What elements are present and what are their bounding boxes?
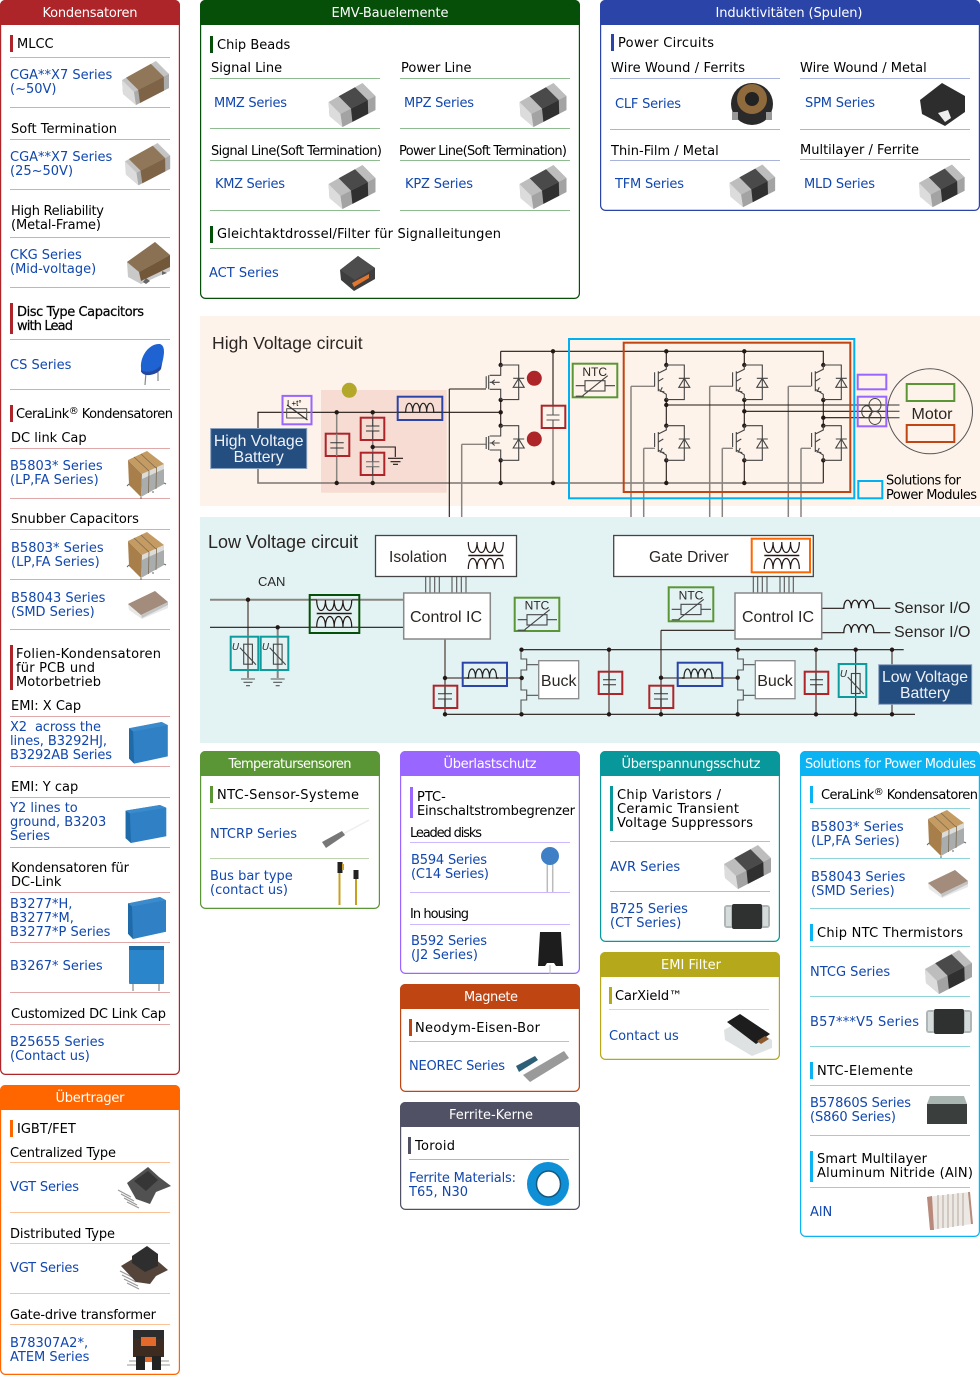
sub-heading: Signal Line: Signal Line [211, 61, 282, 76]
panel header: EMV-Bauelemente [200, 0, 580, 25]
panel: Ueberspannungsschutz [600, 751, 780, 941]
link: KPZ Series: KPZ Series [405, 177, 473, 192]
heading: CeraLink Kondensatoren: Kondensatoren [78, 407, 173, 422]
heading: Chip Varistors: Voltage Suppressors [617, 816, 753, 831]
capacitor: left buck input [434, 686, 457, 708]
icon: NTCRP sensor [322, 820, 369, 848]
link: B78307A2 ATEM Series: ATEM Series [10, 1350, 90, 1365]
inductor: high voltage filter [398, 397, 442, 420]
capacitor: DC link [326, 434, 349, 456]
block: Control IC left: Control IC [410, 609, 482, 626]
heading: Neodym-Eisen-Bor: Neodym-Eisen-Bor [415, 1021, 541, 1036]
heading: CeraLink Kondensatoren: CeraLink [821, 788, 874, 803]
panel header: Magnete: Magnete [464, 990, 518, 1005]
heading: CarXield: CarXield™ [615, 989, 682, 1004]
icon: leaded film capacitor [129, 946, 164, 991]
link: C14 Series: (C14 Series) [411, 867, 489, 882]
heading: MLCC: MLCC [17, 37, 54, 52]
panel header: EMI Filter [600, 952, 780, 977]
link: B5803 Series: (LP,FA Series) [811, 834, 900, 849]
icon: magnets [516, 1051, 569, 1082]
block: Buck left: Buck [541, 673, 577, 690]
component: high voltage battery: Battery [234, 449, 284, 466]
icon: SMD capacitor [128, 591, 168, 619]
heading: Chip Varistors: Ceramic Transient [617, 802, 739, 817]
link: CGA X7 25 to 50V: (25~50V) [10, 164, 73, 179]
panel header: Temperatursensoren: Temperatursensoren [228, 757, 352, 772]
marker: red dot lower [527, 432, 542, 446]
heading: Gleichtaktdrossel/Filter: Gleichtaktdrossel/Filter für Signalleitungen [217, 227, 501, 242]
component: high voltage battery [211, 428, 307, 468]
heading: CeraLink Kondensatoren [810, 786, 978, 803]
link: B5803 Series snubber: B5803* Series [11, 541, 104, 556]
icon: Y capacitor [126, 805, 166, 843]
frame: power modules [569, 339, 854, 498]
link: X2 across the lines: X2 across the [10, 720, 101, 735]
sub-heading: Power Line: Power Line [401, 61, 472, 76]
sub-heading: Leaded disks: Leaded disks [410, 826, 482, 841]
icon: DC-link film capacitor [128, 897, 166, 939]
heading: NTC-Sensor-Systeme: NTC-Sensor-Systeme [217, 788, 359, 803]
sub-heading: Soft Termination: Soft Termination [11, 122, 117, 137]
heading: IGBT/FET: IGBT/FET [17, 1122, 76, 1137]
panel header: Kondensatoren: Kondensatoren [42, 6, 138, 21]
block: Buck left [539, 661, 579, 699]
frame: purple ferrite clamp [858, 397, 886, 426]
link: Bus bar type: (contact us) [210, 883, 288, 898]
icon: olive marker [342, 383, 357, 398]
icon: chip bead MMZ [328, 83, 376, 127]
heading: Power Circuits: Power Circuits [618, 36, 714, 51]
link: MLD Series: MLD Series [804, 177, 875, 192]
block: Isolation [376, 536, 516, 576]
link: AlN: AlN [810, 1205, 832, 1220]
link: Bus bar type: Bus bar type [210, 869, 293, 884]
icon: CeraLink capacitor [927, 810, 966, 858]
heading: Smart Multilayer AlN [810, 1151, 973, 1182]
panel header: Solutions for Power Modules: Solutions for Power Modules [805, 757, 976, 772]
capacitor: Y cap lower [361, 453, 384, 475]
legend: solutions for power modules: Power Modules [886, 488, 977, 503]
component: low voltage battery: Low Voltage [882, 669, 968, 686]
switch: MOSFET upper [486, 365, 524, 400]
link: Ferrite Materials: Ferrite Materials: [409, 1171, 516, 1186]
heading: NTC-Elemente: NTC-Elemente [817, 1064, 913, 1079]
panel header: EMI Filter: EMI Filter [661, 958, 722, 973]
link: B3292AB Series: B3292AB Series [10, 748, 112, 763]
varistor: battery side [839, 664, 866, 697]
link: CGA X7 up to 50V: CGA**X7 Series [10, 68, 112, 83]
link: B58043 Series: B58043 Series [11, 591, 105, 606]
panel: Temperatursensoren [200, 751, 380, 908]
link: ACT Series: ACT Series [209, 266, 279, 281]
panel: Uebertrager [0, 1085, 180, 1374]
component: low voltage battery: Battery [900, 685, 950, 702]
icon: chip bead MPZ [520, 83, 566, 127]
link: Y2 lines to ground: ground, B3203 [10, 815, 106, 830]
link: B3267 Series: B3267* Series [10, 959, 103, 974]
panel: Low Voltage circuit [200, 517, 980, 743]
link: Contact us: Contact us [609, 1029, 679, 1044]
inductor: right buck [678, 663, 722, 686]
group: IGBT inverter switches [655, 365, 847, 460]
link: NTCG Series: NTCG Series [810, 965, 890, 980]
panel header: Ueberspannungsschutz: Überspannungsschutz [622, 755, 761, 772]
link: B594 Series: B594 Series [411, 853, 487, 868]
link: NEOREC Series: NEOREC Series [409, 1059, 505, 1074]
icon: S860 element [927, 1096, 967, 1124]
icon: CeraLink capacitor [127, 451, 166, 499]
link: Y2 lines to ground: Series [10, 829, 50, 844]
link: B5803 Series: (LP,FA Series) [10, 473, 99, 488]
link: B58043 Series: B58043 Series [811, 870, 905, 885]
link: MMZ Series: MMZ Series [214, 96, 287, 111]
link: CS Series: CS Series [10, 358, 72, 373]
wiring: low voltage lines [210, 576, 915, 714]
link: TFM Series: TFM Series [614, 177, 684, 192]
panel header: Ferrite-Kerne: Ferrite-Kerne [449, 1108, 533, 1123]
link: NTCRP Series: NTCRP Series [210, 827, 297, 842]
heading: Chip NTC Thermistors: Chip NTC Thermistors [817, 926, 963, 941]
link: SPM Series: SPM Series [805, 96, 875, 111]
sub-heading: Thin-Film Metal: Thin-Film / Metal [610, 144, 719, 159]
icon: MLD inductor [919, 164, 965, 207]
panel header: Ueberspannungsschutz [600, 751, 780, 776]
component: motor: Motor [912, 406, 953, 423]
panel header: Ueberlastschutz [400, 751, 580, 776]
common mode choke [310, 595, 359, 633]
panel header: Uebertrager [0, 1085, 180, 1110]
heading: CeraLink Kondensatoren: ® [69, 406, 79, 417]
link: CLF Series: CLF Series [615, 97, 681, 112]
block: Control IC right: Control IC [742, 609, 814, 626]
NTC: power module [573, 364, 617, 397]
link: CGA X7 up to 50V: (~50V) [10, 82, 56, 97]
heading: CeraLink Kondensatoren: Kondensatoren [883, 788, 978, 803]
heading: Low Voltage circuit: Low Voltage circuit [208, 532, 358, 552]
wiring: high voltage rails [258, 351, 899, 535]
NTC: low voltage left: NTC [525, 598, 550, 612]
heading: Chip Varistors: Chip Varistors / [617, 788, 722, 803]
link: B725 Series: (CT Series) [610, 916, 681, 931]
link: B5803 Series snubber: (LP,FA Series) [11, 555, 100, 570]
panel: Induktivitaeten [600, 0, 980, 210]
block: Gate Driver [614, 536, 813, 576]
panel header: Kondensatoren [0, 0, 180, 25]
sub-heading: Distributed Type: Distributed Type [10, 1227, 115, 1242]
icon: CarXield filter [724, 1014, 772, 1056]
link: B58043 Series: (SMD Series) [11, 605, 95, 620]
block: Buck right: Buck [757, 673, 794, 690]
sub-heading: High Reliability: High Reliability [11, 204, 104, 219]
sub-heading: In housing: In housing [410, 907, 469, 922]
icon: ferrite toroid [527, 1162, 569, 1206]
component: low voltage battery [879, 665, 972, 704]
panel: Kondensatoren [0, 0, 180, 1074]
label: CAN: CAN [258, 574, 285, 589]
switch: MOSFET lower [486, 426, 524, 460]
sub-heading: Multilayer Ferrite: Multilayer / Ferrite [800, 143, 919, 158]
heading: Disc Type Capacitors with Lead [10, 303, 144, 334]
heading: CeraLink Kondensatoren [10, 405, 173, 422]
frame: magnets inverter [624, 343, 850, 492]
legend: solutions for power modules [858, 474, 977, 503]
icon: CLF inductor [731, 83, 773, 125]
icon: distributed transformer [120, 1246, 168, 1289]
component: motor [888, 369, 972, 454]
heading: Disc Type Capacitors with Lead: Disc Type Capacitors [17, 305, 144, 320]
block: Gate Driver: Gate Driver [649, 549, 729, 566]
link: B5803 Series: B5803* Series [10, 459, 103, 474]
link: S860 Series: (S860 Series) [810, 1110, 896, 1125]
panel: EMV-Bauelemente [200, 0, 580, 298]
varistor: CAN low [261, 637, 288, 670]
icon: B725 chip [724, 904, 770, 929]
icon: gate-drive transformer [127, 1330, 170, 1370]
varistor: battery side: U [840, 669, 848, 680]
panel header: Induktivitaeten: Induktivitäten (Spulen) [716, 6, 862, 21]
NTC: low voltage left [515, 598, 559, 631]
sub-heading: Signal Line Soft Termination: Signal Line(Soft Termination) [211, 144, 382, 159]
sub-heading: EMI Y cap: EMI: Y cap [11, 780, 78, 795]
link: VGT Series distributed: VGT Series [10, 1261, 79, 1276]
sub-heading: Customized DC Link Cap: Customized DC Link Cap [11, 1007, 166, 1022]
block: Control IC right [735, 593, 822, 639]
sub-heading: Snubber Capacitors: Snubber Capacitors [11, 512, 139, 527]
link: B58043 Series: (SMD Series) [811, 884, 895, 899]
link: AVR Series: AVR Series [610, 860, 680, 875]
component: high voltage battery: High Voltage [214, 433, 304, 450]
heading: Folien-Kondensatoren: Motorbetrieb [16, 675, 101, 690]
heading: Chip Varistors [610, 786, 753, 831]
icon: AVR varistor [724, 845, 771, 889]
heading: PTC Einschaltstrombegrenzer: Einschaltstrombegrenzer [417, 804, 576, 819]
icon: MLCC chip soft termination [125, 143, 170, 185]
heading: Smart Multilayer AlN: Aluminum Nitride (AlN) [817, 1166, 973, 1181]
block: Control IC left [404, 593, 490, 639]
link: B592 Series: B592 Series [411, 934, 487, 949]
link: B25655 Series: (Contact us) [10, 1049, 90, 1064]
varistor: CAN high [231, 637, 258, 670]
highlight: DC link capacitor area [321, 390, 447, 493]
link: B3277 Series: B3277*P Series [10, 925, 111, 940]
NTC: power module: NTC [582, 365, 607, 379]
marker: red dot upper [527, 371, 542, 386]
panel header: Temperatursensoren [200, 751, 380, 776]
NTC: low voltage right [669, 587, 713, 621]
panel: Magnete [400, 984, 580, 1091]
link: J2 Series: (J2 Series) [411, 948, 478, 963]
link: B725 Series: B725 Series [610, 902, 688, 917]
block: Buck right [755, 661, 795, 699]
legend: solutions for power modules: Solutions for [886, 474, 962, 488]
icon: MLCC chip [122, 61, 169, 105]
icon: X capacitor [129, 722, 168, 764]
icon: TFM inductor [730, 164, 775, 207]
panel: High Voltage circuit [200, 316, 980, 535]
sub-heading: Metal-Frame: (Metal-Frame) [11, 218, 101, 233]
icon: chip bead KMZ [328, 165, 376, 209]
link: B3277 Series: B3277*M, [10, 911, 74, 926]
icon: SMD capacitor [928, 870, 968, 898]
sub-heading: Wire Wound Metal: Wire Wound / Metal [800, 61, 927, 76]
link: B25655 Series: B25655 Series [10, 1035, 104, 1050]
heading: Smart Multilayer AlN: Smart Multilayer [817, 1152, 928, 1167]
varistor: CAN low: U [262, 642, 270, 653]
icon: thermistor in purple frame [282, 396, 312, 424]
icon: AlN stack [927, 1192, 972, 1230]
heading: Folien-Kondensatoren [10, 645, 161, 690]
heading: PTC Einschaltstrombegrenzer: PTC- [417, 790, 446, 805]
link: B78307A2 ATEM Series: B78307A2*, [10, 1336, 88, 1351]
icon: chip bead KPZ [520, 165, 566, 209]
sub-heading: Wire Wound Ferrits: Wire Wound / Ferrits [611, 61, 745, 76]
icon: busbar sensors [338, 862, 358, 905]
panel: EMI Filter [600, 952, 780, 1059]
icon: CeraLink snubber capacitor [127, 532, 166, 580]
panel header: EMV-Bauelemente: EMV-Bauelemente [332, 6, 448, 21]
link: Y2 lines to ground: Y2 lines to [10, 801, 78, 816]
panel: Ueberlastschutz [400, 751, 580, 974]
link: lines B3292HJ: lines, B3292HJ, [10, 734, 107, 749]
panel header: Magnete [400, 984, 580, 1009]
inductor: left buck [463, 663, 507, 686]
link: KMZ Series: KMZ Series [215, 177, 285, 192]
heading: PTC Einschaltstrombegrenzer [410, 787, 576, 819]
link: B57860S Series: B57860S Series [810, 1096, 911, 1111]
sensor inductors [842, 600, 876, 633]
icon: leaded disk [541, 847, 559, 892]
heading: Disc Type Capacitors with Lead: with Lead [17, 319, 73, 334]
heading: Folien-Kondensatoren: Folien-Kondensatoren [16, 647, 161, 662]
heading: Chip Beads: Chip Beads [217, 38, 290, 53]
panel header: Ferrite-Kerne [400, 1102, 580, 1127]
sub-heading: EMI X Cap: EMI: X Cap [11, 699, 81, 714]
link: B5803 Series: B5803* Series [811, 820, 904, 835]
capacitor: Y cap upper [361, 418, 384, 440]
link: CGA X7 25 to 50V: CGA**X7 Series [10, 150, 112, 165]
sub-heading: DC-Link: DC-Link [11, 875, 62, 890]
label: Sensor I/O lower: Sensor I/O [894, 624, 970, 641]
frame: purple upper [858, 375, 886, 389]
icon: metal-frame MLCC [127, 242, 170, 284]
icon: SPM inductor [920, 83, 965, 126]
capacitor: battery side [805, 672, 828, 694]
sub-heading: DC link Cap: DC link Cap [11, 431, 87, 446]
link: VGT Series centralized: VGT Series [10, 1180, 79, 1195]
panel header: Uebertrager: Übertrager [56, 1089, 125, 1106]
heading: CeraLink Kondensatoren: CeraLink [16, 407, 69, 422]
sub-heading: Kondensatoren fuer DC-Link: Kondensatoren für [11, 861, 130, 876]
heading: Folien-Kondensatoren: für PCB und [16, 661, 95, 676]
sub-heading: Gate-drive transformer: Gate-drive transformer [10, 1308, 157, 1323]
icon: centralized transformer [118, 1167, 171, 1208]
link: T65 N30: T65, N30 [408, 1185, 468, 1200]
heading: High Voltage circuit: High Voltage circuit [212, 333, 363, 353]
link: CKG Series: (Mid-voltage) [10, 262, 96, 277]
label: Sensor I/O upper: Sensor I/O [894, 600, 970, 617]
panel: Solutions for Power Modules [800, 751, 980, 1236]
icon: common mode filter [340, 256, 375, 291]
panel: Ferrite-Kerne [400, 1102, 580, 1209]
panel header: Solutions for Power Modules [800, 751, 980, 776]
icon: blue disc capacitor [141, 344, 164, 385]
sub-heading: Power Line Soft Termination: Power Line(Soft Termination) [399, 144, 567, 159]
capacitor: bus capacitor [542, 406, 565, 428]
varistor: CAN high: U [232, 642, 240, 653]
heading: CeraLink Kondensatoren: ® [874, 787, 884, 798]
block: Isolation: Isolation [389, 549, 447, 566]
heading: Toroid: Toroid [414, 1139, 455, 1154]
panel header: Induktivitaeten [600, 0, 980, 25]
NTC: low voltage right: NTC [679, 588, 704, 602]
link: MPZ Series: MPZ Series [404, 96, 474, 111]
sub-heading: Centralized Type: Centralized Type [10, 1146, 116, 1161]
link: B3277 Series: B3277*H, [10, 897, 72, 912]
panel header: Ueberlastschutz: Überlastschutz [444, 755, 537, 772]
icon: housed PTC [538, 932, 563, 974]
capacitor: rail [599, 672, 622, 694]
icon: V5 chip [926, 1009, 972, 1034]
icon: NTCG chip [925, 950, 972, 994]
link: B57 V5 Series: B57***V5 Series [810, 1015, 919, 1030]
capacitor: right buck input [649, 686, 673, 708]
link: CKG Series: CKG Series [10, 248, 82, 263]
icon: thermistor in purple frame: I +t° [287, 399, 302, 408]
